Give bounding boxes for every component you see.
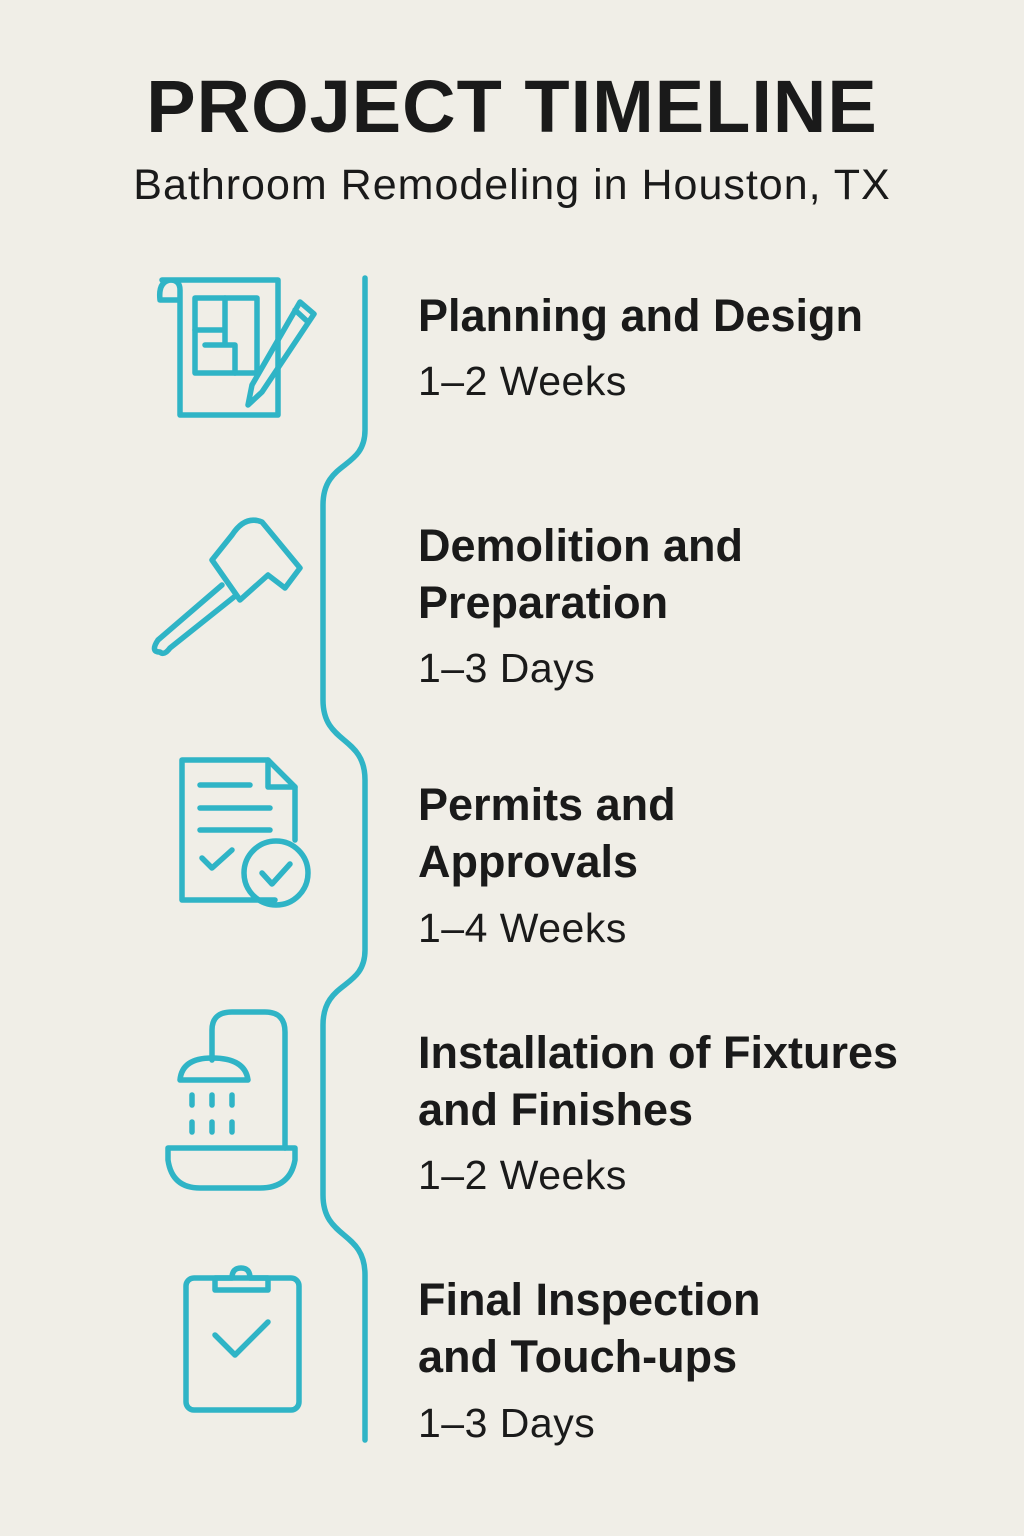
- step 4 heading: and Finishes: [418, 1084, 693, 1135]
- title: PROJECT TIMELINE: [146, 65, 878, 148]
- step 3 heading: [418, 779, 676, 887]
- icon: shower: [168, 1012, 295, 1188]
- step 3 heading: Approvals: [418, 836, 638, 887]
- step 2 heading: [418, 520, 743, 628]
- icon: clipboard: [186, 1268, 299, 1410]
- step 1 duration: 1–2 Weeks: [418, 358, 627, 404]
- icon: document with check: [182, 760, 308, 905]
- step 2 duration: 1–3 Days: [418, 645, 595, 691]
- step 5 heading: Final Inspection: [418, 1274, 761, 1325]
- step 2 heading: Demolition and: [418, 520, 743, 571]
- icon: hammer: [154, 520, 300, 653]
- step 5 heading: and Touch-ups: [418, 1331, 737, 1382]
- step 4 heading: Installation of Fixtures: [418, 1027, 898, 1078]
- step 5 duration: 1–3 Days: [418, 1400, 595, 1446]
- icon: blueprint: [160, 280, 314, 415]
- step 5 heading: [418, 1274, 761, 1382]
- step 1 heading: Planning and Design: [418, 290, 863, 341]
- subtitle: Bathroom Remodeling in Houston, TX: [133, 161, 891, 209]
- timeline line: [323, 278, 365, 1440]
- step 4 heading: [418, 1027, 898, 1135]
- step 2 heading: Preparation: [418, 577, 668, 628]
- step 3 duration: 1–4 Weeks: [418, 905, 627, 951]
- step 4 duration: 1–2 Weeks: [418, 1152, 627, 1198]
- step 3 heading: Permits and: [418, 779, 676, 830]
